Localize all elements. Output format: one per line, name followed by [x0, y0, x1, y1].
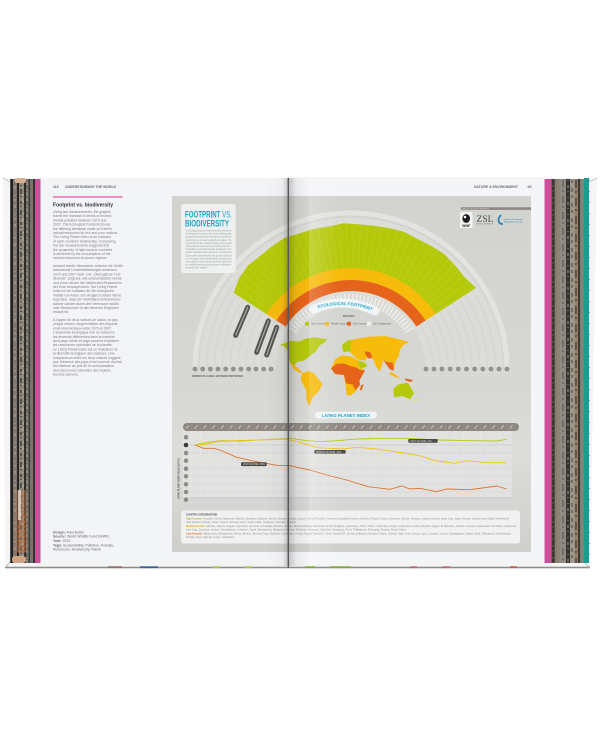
- article text: English: the prosperity of high-income countries: [53, 248, 113, 252]
- article text: English: Using two measurements, the graphic: [53, 210, 111, 214]
- partner logos: [460, 207, 531, 228]
- middle income countries: [186, 525, 517, 532]
- callout: high income: [408, 439, 438, 443]
- middle income countries: Iran, Iraq, Jamaica, Jordan, Kazakhstan, Lebanon, Libya, Macedonia, Malaysia, Mexico, Moldova, Morocco, Namibia, Paraguay, Peru, Philippines, Romania, Russia, South Africa: [186, 529, 407, 532]
- ecological footprint: high income band: [234, 223, 476, 314]
- article text: French: les plus pauvres.: [53, 373, 79, 377]
- title text: BIODIVERSITY: [185, 218, 229, 230]
- map key: Not Categorised: [373, 323, 392, 326]
- credits: Year: 2010: [53, 539, 70, 543]
- title text: FOOTPRINT VS.: [185, 210, 232, 220]
- article text: German: cher Ressourcen in den ärmeren Regionen: [53, 306, 119, 310]
- map key: High Income: [311, 323, 326, 326]
- low income countries: Low Income: Afghanistan, Bangladesh, Benin, Bhutan, Burkina Faso, Burundi, Cambodia, Central African Republic, Chad, Congo DR, Eritrea, Ethiopia, Gambia, Ghana, Guinea, Haiti, India, Kenya, Laos, Lesotho, Liberia, Madagascar, Malawi, Mali, Mauritania, Mozambique: [186, 532, 512, 535]
- high income countries: High Income: Australia, Austria, Bahamas, Bahrain, Barbados, Belgium, Brunei, Canada, Croatia, Cyprus, Czech Republic, Denmark, Equatorial Guinea, Estonia, Finland, France, Germany, Greece, Hungary, Iceland, Ireland, Israel, Italy, Japan, Kuwait, Luxembourg, Malta, Netherlands: [186, 518, 510, 520]
- title card text: Living Planet Index reflects changes in the health: [186, 242, 232, 245]
- right scale dots: [424, 367, 509, 371]
- article text: German: Vielfalt von Arten. Ein Vergleich beider Werte: [53, 293, 121, 297]
- article text: English: The Living Planet Index is an indicator: [53, 235, 112, 239]
- high income countries: [186, 518, 510, 524]
- left page header: 110: [53, 185, 59, 189]
- callout: low income: LOW INCOME -58%: [243, 463, 266, 466]
- ecological footprint curved label: ECOLOGICAL FOOTPRINT: [318, 302, 373, 310]
- right fore-edge image stripes: [552, 178, 590, 563]
- right page header: 65: [528, 185, 532, 189]
- title card text: The Ecological Footprint measures humanity's demand on: [186, 230, 232, 232]
- high income line: [195, 438, 507, 445]
- ecological footprint: middle income band: [266, 268, 436, 320]
- inner tick ring: [292, 299, 410, 331]
- article text: English: natural resources by rich and poor nations.: [53, 231, 118, 235]
- article text: English: [53, 210, 118, 260]
- chart background: [183, 431, 512, 497]
- logo: ZSL: ZSL: [476, 215, 494, 225]
- article text: English: natural resources of poorer regions.: [53, 256, 108, 260]
- tag bars on outer arcs: [236, 307, 277, 355]
- credits: [53, 530, 114, 552]
- article text: German: Index ist ein Indikator für die biologische: [53, 289, 114, 293]
- logo: global footprint network: Global Footprint: [504, 218, 523, 221]
- logo: global footprint network: Network: [504, 221, 525, 224]
- low income countries: Zambia, Togo, Uganda, Yemen, Zimbabwe: [186, 536, 235, 539]
- article heading: Footprint vs. biodiversity: [53, 202, 113, 208]
- article text: French: comparaison entre les deux valeurs suggère: [53, 356, 121, 360]
- article text: German: starker Länder durch den Verbrauch natürli-: [53, 302, 120, 306]
- article text: German: abdruck“ zeigt auf, wie unterschiedlich reiche: [53, 277, 122, 281]
- title card text: on the planet, while biodiversity has declined: [186, 257, 232, 260]
- logo: WWF panda: WWF: [462, 224, 470, 228]
- article text: French: [53, 318, 122, 377]
- article text: German: Anhand zweier Messwerte zeichnet die Grafik: [53, 264, 123, 268]
- right pink page edge: [544, 179, 552, 563]
- middle income line: [195, 439, 507, 463]
- title card text: productive land and sea required to provide the: [186, 236, 232, 239]
- article text: English: of each country's biodiversity. Comparing: [53, 239, 116, 243]
- callout: high income: HIGH INCOME +5%: [410, 440, 433, 443]
- low income line: [195, 445, 507, 492]
- article text: French: dont pays riches et pays pauvres exploitent: [53, 339, 119, 343]
- title card text: the biosphere in terms of the area of biologically: [186, 233, 232, 236]
- title card text: most rapidly in low-income countries, which rely: [186, 260, 232, 264]
- logo: ZSL: LIVING CONSERVATION: [476, 222, 494, 226]
- article text: French: les énormes différences dans la manière: [53, 335, 115, 339]
- title text: [185, 210, 232, 230]
- left scale dots: [193, 367, 273, 371]
- scale caption: NUMBER OF GLOBAL HECTARES PER PERSON: [192, 375, 243, 378]
- article text: French: des ressources naturelles des régions: [53, 368, 111, 372]
- logo: global footprint network: [499, 215, 525, 224]
- infographic panel: [172, 196, 531, 552]
- title card text: of the planet's ecosystems by tracking trends in: [186, 245, 232, 248]
- y axis dots: [184, 435, 188, 502]
- chart header band: [183, 423, 519, 431]
- article text: German: 1970 und 2007 nach. Der „Ökologische Fuß-: [53, 272, 121, 276]
- credits: Source: World Wildlife Fund (WWF): [53, 535, 109, 539]
- left pink page edge: [35, 179, 41, 563]
- title card text: around the world.: [186, 267, 208, 270]
- living planet index label: [315, 412, 377, 418]
- map key: Low Income: [353, 323, 367, 326]
- country categorisation box: COUNTRY CATEGORISATION: [186, 512, 217, 516]
- article text: English: mental pollution between 1970 and: [53, 218, 106, 222]
- bottom page edge colour marks: [108, 566, 517, 568]
- right page: [288, 177, 544, 566]
- callout: middle income: [314, 450, 346, 454]
- article text: English: the differing demands made on Earth's: [53, 227, 112, 231]
- credits: Tags: Sustainability, Pollution, Animals,: [53, 543, 114, 547]
- left fore-edge image stripes: [10, 178, 35, 563]
- article text: German: erkauft ist.: [53, 310, 69, 314]
- callout: low income: [241, 462, 267, 466]
- y axis caption: LIVING PLANET INDEX VALUE (1970=1): [178, 458, 180, 499]
- map key: [305, 314, 392, 326]
- partner logos: DATA SOURCE AND PARTNERS: [462, 207, 490, 210]
- ecological footprint: low income band: [276, 280, 426, 326]
- article text: French: les ressources naturelles de la planète.: [53, 343, 113, 347]
- credits: Design: Paul Butler: [53, 530, 85, 534]
- low income countries: [186, 532, 512, 539]
- article text: German: und arme Länder die natürlichen Ressourcen: [53, 281, 122, 285]
- article text: English: traces the increase in levels of environ-: [53, 214, 113, 218]
- credits: Resources, Biodiversity, Plants: [53, 548, 101, 552]
- left page: [40, 178, 288, 566]
- title card text: [186, 230, 232, 270]
- callout: middle income: MIDDLE INCOME -25%: [316, 451, 342, 454]
- right page header: NATURE & ENVIRONMENT: [474, 185, 519, 189]
- ecological footprint curved label: [310, 298, 380, 316]
- left page header: UNDERSTANDING THE WORLD: [65, 185, 116, 189]
- article text: German: wachsende Umweltbelastungen zwischen: [53, 268, 117, 272]
- article text: German: der Erde beanspruchen. Der Living Planet: [53, 285, 117, 289]
- article text: German: [53, 264, 123, 314]
- pink heading rule: [53, 196, 122, 198]
- article text: German: legt nahe, dass der Wohlstand einkommens-: [53, 298, 121, 302]
- article text: French: Le Living Planet Index est un indicateur de: [53, 347, 118, 351]
- country categorisation box: [181, 510, 520, 544]
- high income countries: New Zealand, Norway, Oman, Poland, Portugal, Qatar, Saudi Arabia, Singapore, Slovakia, Slovenia: [186, 521, 297, 524]
- article text: English: is achieved by the consumption of the: [53, 252, 111, 256]
- world map: [280, 336, 418, 406]
- concentric scale arcs: [195, 213, 507, 369]
- article text: French: phique retrace l'augmentation des impacts: [53, 322, 118, 326]
- middle income countries: Middle Income: Albania, Algeria, Angola, Argentina, Armenia, Azerbaijan, Belarus, Belize, Bolivia, Bosnia, Botswana, Brazil, Bulgaria, Cameroon, Chile, China, Colombia, Congo, Costa Rica, Cuba, Ecuador, Egypt, El Salvador, Gabon, Georgia, Guatemala, Honduras, Indonesia: [186, 525, 517, 528]
- map key: Middle Income: [331, 323, 348, 326]
- article text: French: la diversité biologique des espèces. Une: [53, 352, 115, 356]
- living planet index label: LIVING PLANET INDEX: [322, 413, 371, 418]
- title card text: on natural resources being consumed elsewhere: [186, 264, 232, 267]
- map key: MAP KEY: [343, 314, 355, 318]
- title card text: resources we use and to absorb our waste. The: [186, 239, 232, 242]
- article text: French: À l'appui de deux valeurs de calcul, ce gra-: [53, 318, 118, 322]
- article text: French: L'empreinte écologique met en évidence: [53, 331, 115, 335]
- book cover edge: [3, 178, 597, 568]
- article text: French: environnementaux entre 1970 et 2007.: [53, 326, 112, 330]
- article text: English: the two measurements suggests that: [53, 244, 109, 248]
- title card: [181, 204, 236, 273]
- title card text: thousands of vertebrate species populations. The: [186, 248, 232, 251]
- article text: French: que l'essence des pays à fort pouvoir d'achat: [53, 360, 122, 364]
- article text: French: est obtenue au prix de la consommation: [53, 364, 114, 368]
- article text: English: 2007. The Ecological Footprint shows: [53, 223, 111, 227]
- chart gridlines: [190, 445, 512, 498]
- title card text: high-income countries place the greatest demand: [186, 254, 232, 257]
- title card text: graphic compares both measures, showing how: [186, 251, 232, 254]
- gutter shadow: [266, 178, 339, 568]
